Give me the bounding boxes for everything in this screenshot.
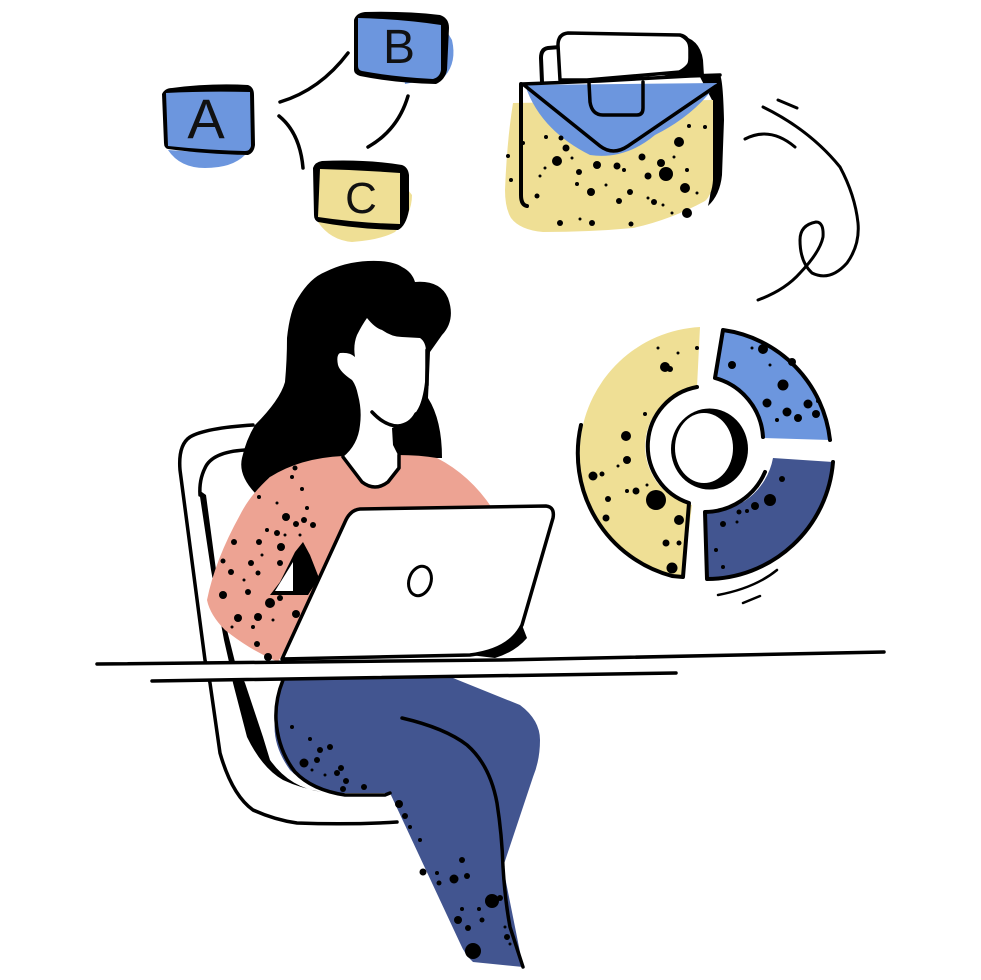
envelope body bbox=[505, 100, 713, 232]
segment: dark blue bbox=[705, 458, 833, 579]
face lines bbox=[343, 350, 427, 487]
box A bbox=[162, 84, 255, 168]
arrow: curly swoosh bbox=[745, 100, 858, 300]
segment: yellow bbox=[580, 327, 700, 577]
box B bbox=[354, 12, 453, 84]
box A: A bbox=[187, 87, 225, 150]
person working at laptop bbox=[180, 261, 553, 967]
sweater bbox=[207, 455, 492, 662]
back sheet bbox=[541, 47, 560, 82]
trouser speckles bbox=[290, 725, 512, 959]
envelope flap bbox=[525, 83, 717, 156]
arm triangle bbox=[270, 542, 319, 595]
chair bbox=[180, 425, 397, 824]
envelope right shadow bbox=[700, 75, 724, 206]
box B: B bbox=[383, 21, 415, 74]
laptop bbox=[282, 506, 553, 659]
donut speckles bbox=[588, 344, 820, 574]
letter sheet bbox=[558, 33, 690, 80]
icon: envelope bbox=[505, 33, 724, 232]
box C bbox=[313, 160, 412, 242]
donut chart bbox=[578, 327, 833, 603]
face and neck bbox=[337, 318, 426, 487]
donut centre ring bbox=[671, 408, 748, 490]
hair bbox=[241, 261, 451, 493]
trousers bbox=[275, 678, 540, 967]
diagram: A B C linked boxes bbox=[162, 12, 453, 242]
segment: light blue bbox=[715, 330, 830, 440]
envelope speckles bbox=[506, 124, 707, 226]
desk bbox=[97, 652, 884, 681]
motion marks bbox=[718, 570, 777, 603]
sweater speckles bbox=[219, 466, 316, 661]
box C: C bbox=[345, 174, 377, 223]
connectors bbox=[279, 53, 408, 168]
